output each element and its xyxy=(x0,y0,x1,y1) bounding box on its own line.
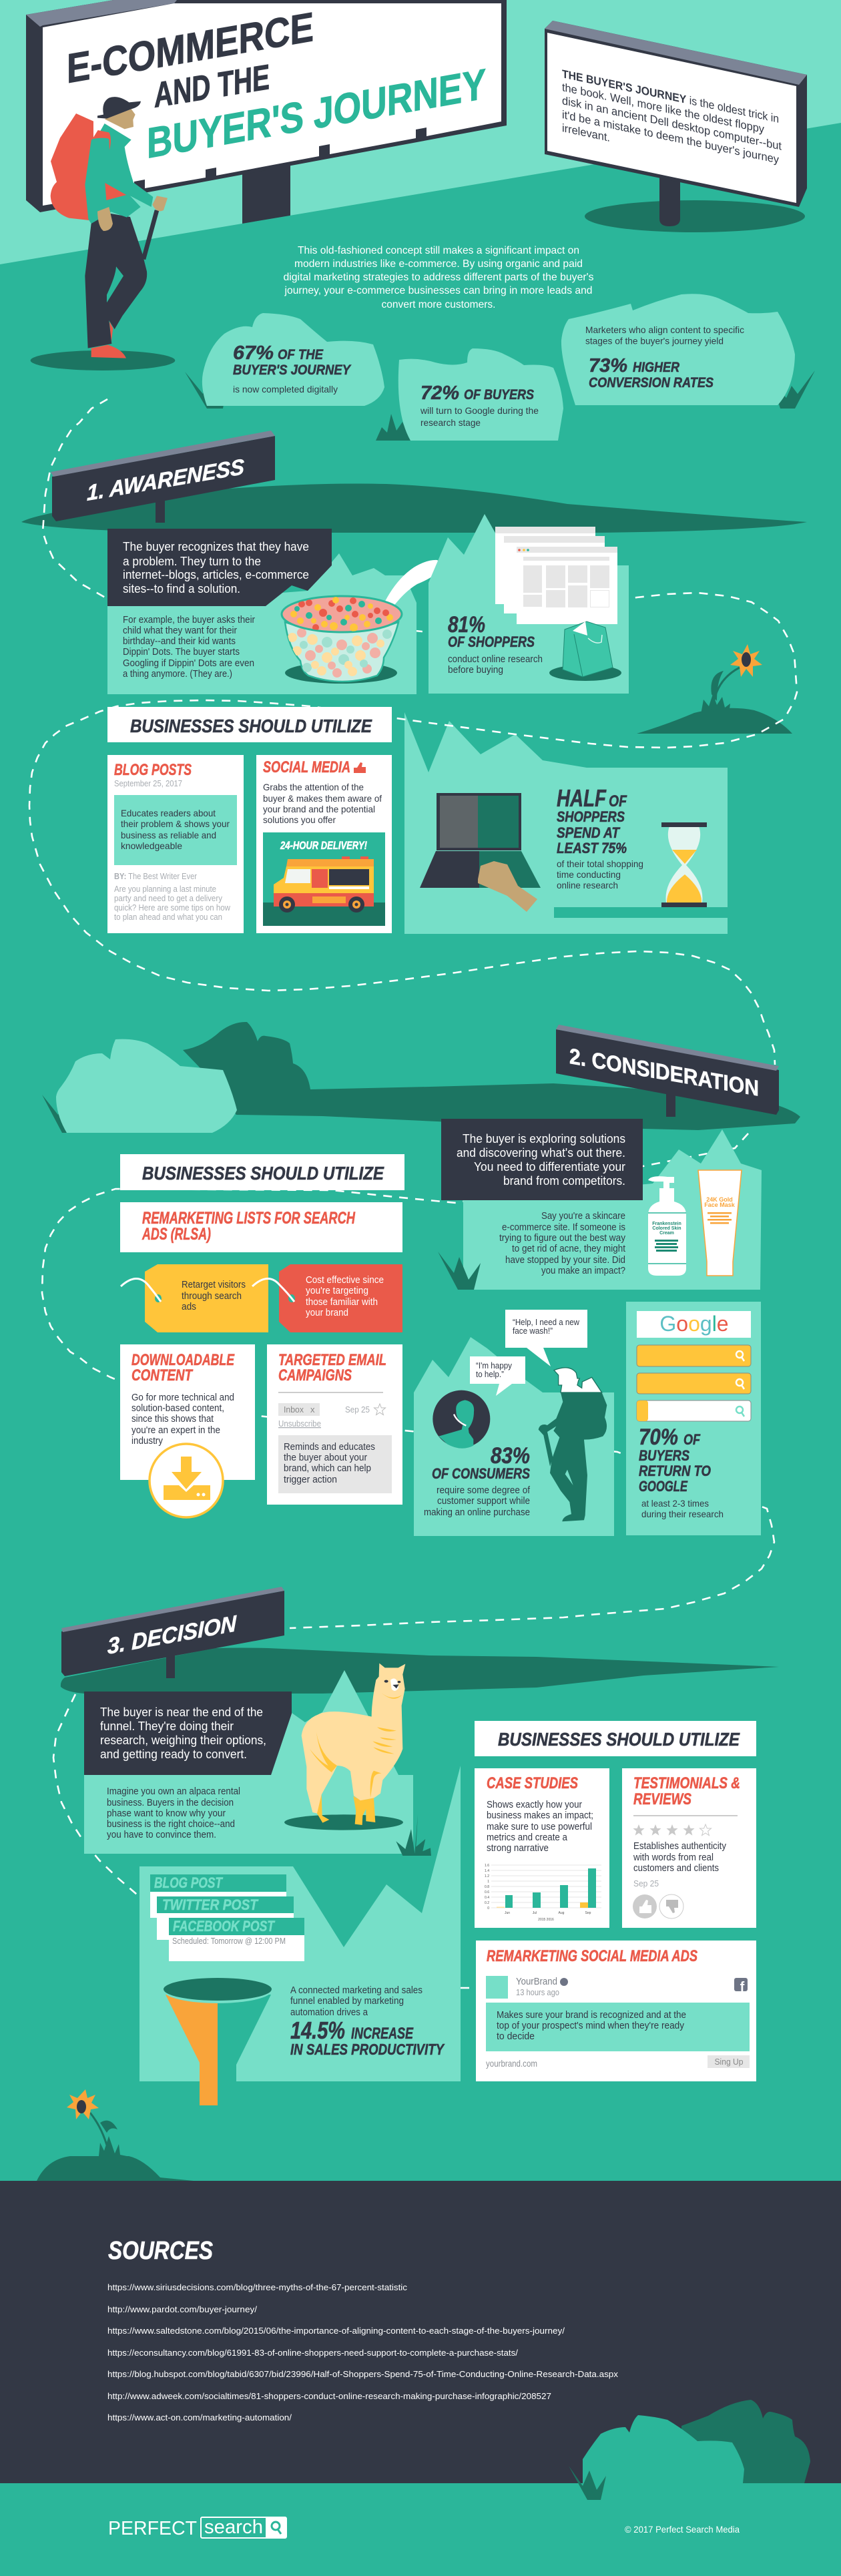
card: downloadable content: CONTENT xyxy=(131,1366,194,1384)
card: targeted email campaigns: trigger action xyxy=(284,1475,337,1485)
bar chart: 1.4 xyxy=(485,1869,489,1873)
bar chart: 0.8 xyxy=(485,1885,489,1889)
panel: alpaca example xyxy=(84,1663,431,1856)
card: blog posts: BLOG POSTS xyxy=(114,761,192,779)
stat text: 70% xyxy=(639,1425,678,1450)
source links: https://www.saltedstone.com/blog/2015/06/the-importance-of-aligning-content-to-each-stage-of-the-buyers-journey/ xyxy=(107,2326,565,2336)
card: testimonials and reviews xyxy=(622,1768,756,1928)
intro paragraph: modern industries like e-commerce. By using organic and paid xyxy=(294,258,583,270)
panel: cereal example xyxy=(107,553,442,694)
stat text: at least 2-3 times xyxy=(641,1498,709,1509)
card: blog posts: Are you planning a last minute xyxy=(114,884,216,894)
stat bush: 67%: 67% xyxy=(233,342,274,364)
panel: 70% return to Google xyxy=(626,1302,761,1535)
stat text: before buying xyxy=(448,665,503,676)
card: blog posts: party and need to get a delivery xyxy=(114,893,222,903)
callout: decision intro xyxy=(84,1692,292,1775)
card: blog posts: knowledgeable xyxy=(121,840,182,851)
sign text xyxy=(562,67,782,166)
card: testimonials and reviews: Establishes authenticity xyxy=(633,1841,727,1852)
stat bush: 73%: HIGHER xyxy=(633,360,680,375)
source links: https://blog.hubspot.com/blog/tabid/6307/bid/23996/Half-of-Shoppers-Spend-75-of-Time-Conducting-Online-Research-Data.aspx xyxy=(107,2369,619,2379)
logo: Perfect Search xyxy=(108,2517,286,2539)
skincare text: e-commerce site. If someone is xyxy=(502,1222,625,1233)
card: testimonials and reviews: Sep 25 xyxy=(633,1878,659,1888)
card: downloadable content: since this shows that xyxy=(131,1414,214,1425)
speech bubble: help, face wash: face wash!” xyxy=(513,1326,553,1336)
intro paragraph: This old-fashioned concept still makes a significant impact on xyxy=(298,245,579,256)
icon: thumbs down xyxy=(659,1894,683,1918)
stat: half of shoppers: of their total shopping xyxy=(557,858,643,869)
sign: 3. Decision: 3. DECISION xyxy=(107,1611,237,1659)
stat bush: 72%: 72% xyxy=(420,382,459,404)
card: case studies: Shows exactly how your xyxy=(487,1800,582,1810)
hill: decision xyxy=(61,1647,779,1694)
search bar 1 xyxy=(637,1345,751,1366)
callout: decision intro: funnel. They're doing their xyxy=(100,1720,234,1733)
stat text: OF SHOPPERS xyxy=(448,633,535,650)
callout: consideration intro: brand from competitors. xyxy=(503,1174,625,1188)
callout: awareness intro: The buyer recognizes that they have xyxy=(123,540,309,553)
card: downloadable content: solution-based content, xyxy=(131,1403,224,1414)
icon: face mask tube xyxy=(698,1170,742,1276)
grass by bush xyxy=(569,2466,606,2500)
copyright: © 2017 Perfect Search Media xyxy=(625,2524,740,2535)
callout: consideration intro: You need to differentiate your xyxy=(474,1160,625,1174)
stat text: GOOGLE xyxy=(639,1478,688,1495)
intro paragraph: journey, your e-commerce businesses can bring in more leads and xyxy=(284,285,593,296)
bar chart: 1.6 xyxy=(485,1864,489,1868)
icon: shopping bag xyxy=(549,621,621,681)
tag: retarget visitors: Retarget visitors xyxy=(182,1280,246,1290)
stat bush: 67% xyxy=(185,313,384,409)
stat: half of shoppers: time conducting xyxy=(557,869,621,880)
card: social media xyxy=(256,755,392,933)
stat bush: 67%: BUYER'S JOURNEY xyxy=(233,362,352,378)
hiker with backpack xyxy=(31,97,175,370)
panel: funnel xyxy=(139,1766,461,2105)
icon: thumbs up xyxy=(633,1894,657,1918)
card: blog posts: to plan ahead and what you can xyxy=(114,912,222,922)
bar chart: Sep xyxy=(585,1911,591,1915)
icon: laptop and hand xyxy=(420,793,541,912)
post card: facebook: Scheduled: Tomorrow @ 12:00 PM xyxy=(172,1936,286,1946)
example text: a thing anymore. (They are.) xyxy=(123,668,232,680)
icon: pump bottle: Cream xyxy=(659,1231,674,1236)
card: remarketing social media ads: top of your prospect's mind when they're ready xyxy=(497,2020,684,2031)
star rating xyxy=(633,1824,712,1836)
panel: half of shoppers xyxy=(404,712,728,934)
card: case studies: strong narrative xyxy=(487,1843,549,1854)
hill: awareness xyxy=(21,483,807,533)
icon: support agent xyxy=(433,1390,490,1449)
stat text: A connected marketing and sales xyxy=(290,1985,423,1996)
stat text xyxy=(424,1443,531,1518)
sign: 3. Decision xyxy=(61,1587,284,1678)
google search box xyxy=(637,1311,751,1338)
skincare text: to get rid of acne, they might xyxy=(512,1243,626,1254)
sign: 2. Consideration: 2. CONSIDERATION xyxy=(569,1044,759,1101)
food truck illustration: 24-HOUR DELIVERY! xyxy=(280,839,367,852)
tag: retarget visitors: ads xyxy=(182,1302,196,1312)
card: testimonials and reviews: REVIEWS xyxy=(633,1790,691,1808)
speech bubble: help, face wash xyxy=(505,1310,587,1366)
card: social media: your brand and the potential xyxy=(263,804,375,814)
stat text: 81% xyxy=(448,612,485,637)
source links: https://www.siriusdecisions.com/blog/three-myths-of-the-67-percent-statistic xyxy=(107,2282,408,2292)
card: blog posts: their problem & shows your xyxy=(121,818,230,829)
bar chart: 1 xyxy=(487,1880,489,1884)
card: targeted email campaigns: the buyer about your xyxy=(284,1453,367,1463)
icon: facebook: f xyxy=(740,1980,745,1995)
source links: https://www.act-on.com/marketing-automation/ xyxy=(107,2412,292,2422)
example text: business. Buyers in the decision xyxy=(107,1797,234,1808)
sign text: disk in an ancient Dell desktop computer--but xyxy=(562,93,782,153)
flower on hill xyxy=(37,2089,194,2181)
stat text: making an online purchase xyxy=(424,1507,530,1518)
panel: 83% of consumers xyxy=(414,1337,614,1536)
card: remarketing social media ads: YourBrand xyxy=(516,1977,557,1987)
sign: 2. Consideration xyxy=(556,1025,779,1117)
stat: half of shoppers: OF xyxy=(609,792,627,810)
card: targeted email campaigns: Unsubscribe xyxy=(278,1419,321,1429)
intro paragraph xyxy=(283,245,594,310)
card: blog posts: Educates readers about xyxy=(121,808,216,818)
card: social media: Grabs the attention of the xyxy=(263,782,364,792)
bar chart: 0 xyxy=(487,1906,489,1910)
callout: awareness intro: sites--to find a solution. xyxy=(123,582,240,595)
example text: phase want to know why your xyxy=(107,1808,226,1819)
title text: AND THE xyxy=(154,57,270,115)
card: targeted email campaigns: TARGETED EMAIL xyxy=(278,1351,386,1369)
sign: 1. Awareness: 1. AWARENESS xyxy=(87,455,244,506)
heading: businesses should utilize (decision): BUSINESSES SHOULD UTILIZE xyxy=(498,1729,740,1750)
stat bush: 73%: 73% xyxy=(589,355,627,376)
card: targeted email campaigns: Inbox xyxy=(284,1404,304,1414)
card: blog posts: business as reliable and xyxy=(121,830,216,840)
stat: half of shoppers: SPEND AT xyxy=(557,824,620,841)
stat: half of shoppers: LEAST 75% xyxy=(557,840,627,856)
alpaca illustration xyxy=(284,1663,431,1856)
card: remarketing lists: ADS (RLSA) xyxy=(142,1225,211,1244)
source links: http://www.pardot.com/buyer-journey/ xyxy=(107,2304,257,2314)
tag: cost effective: you're targeting xyxy=(306,1286,368,1296)
card: case studies xyxy=(475,1768,609,1928)
card: remarketing social media ads: REMARKETING SOCIAL MEDIA ADS xyxy=(487,1947,697,1965)
post card: twitter xyxy=(157,1896,294,1940)
bar chart: 0.4 xyxy=(485,1896,489,1900)
stat: half of shoppers: online research xyxy=(557,880,618,890)
skincare text: you make an impact? xyxy=(541,1265,625,1276)
card: downloadable content xyxy=(120,1344,255,1517)
stat bush: 73%: stages of the buyer's journey yield xyxy=(585,335,724,346)
icon: hourglass xyxy=(661,822,707,907)
skincare text: have stopped by your site. Did xyxy=(505,1254,625,1266)
panel: skincare example xyxy=(438,1129,762,1290)
icon: pump bottle xyxy=(648,1176,686,1276)
bar chart: 0.2 xyxy=(485,1901,489,1905)
example text xyxy=(123,614,255,680)
example text xyxy=(107,1786,240,1840)
card: remarketing social media ads: 13 hours ago xyxy=(516,1987,559,1997)
card: downloadable content: you're an expert in the xyxy=(131,1425,220,1436)
stat text: 83% xyxy=(491,1443,530,1469)
billboard: main title xyxy=(26,0,507,230)
example text: For example, the buyer asks their xyxy=(123,614,255,625)
card: case studies: metrics and create a xyxy=(487,1832,568,1843)
tag: cost effective: those familiar with xyxy=(306,1297,378,1308)
post card: facebook: FACEBOOK POST xyxy=(173,1918,275,1935)
stat bush: 72%: research stage xyxy=(420,417,481,428)
heading: businesses should utilize (consideration): BUSINESSES SHOULD UTILIZE xyxy=(142,1163,384,1184)
bar chart: Aug xyxy=(559,1911,565,1915)
heading: businesses should utilize (decision) xyxy=(475,1721,756,1756)
icon: verified badge xyxy=(560,1978,568,1986)
logo: Perfect Search: search xyxy=(204,2517,263,2538)
tag: retarget visitors xyxy=(121,1264,268,1332)
source links: http://www.adweek.com/socialtimes/81-shoppers-conduct-online-research-making-purchase-infographic/208527 xyxy=(107,2391,551,2401)
stat: half of shoppers: SHOPPERS xyxy=(557,808,625,825)
tag: cost effective xyxy=(252,1264,402,1332)
callout: decision intro: research, weighing their options, xyxy=(100,1734,266,1747)
sources heading: SOURCES xyxy=(108,2237,213,2265)
source links: https://econsultancy.com/blog/61991-83-of-online-shoppers-need-support-to-complete-a-purchase-stats/ xyxy=(107,2348,518,2358)
card: blog posts: quick? Here are some tips on how xyxy=(114,903,231,913)
callout: awareness intro: a problem. They turn to the xyxy=(123,555,261,568)
tag: cost effective: your brand xyxy=(306,1308,348,1318)
bar chart: 2015 2016 xyxy=(538,1918,554,1922)
stat: half of shoppers: HALF xyxy=(557,784,607,812)
example text: birthday--and their kid wants xyxy=(123,635,236,647)
card: targeted email campaigns: Sep 25 xyxy=(345,1404,370,1414)
stat bush: 73%: Marketers who align content to specific xyxy=(585,324,744,335)
stat bush: 73%: CONVERSION RATES xyxy=(589,375,714,391)
card: remarketing social media ads: yourbrand.com xyxy=(486,2058,537,2069)
stat bush: 72%: OF BUYERS xyxy=(464,387,534,403)
food truck illustration xyxy=(263,832,385,926)
hiker silhouette xyxy=(539,1368,607,1521)
stat text: during their research xyxy=(641,1509,724,1519)
icon: funnel xyxy=(164,1978,272,2105)
icon: download xyxy=(150,1444,223,1517)
skincare text xyxy=(499,1210,626,1276)
sources section xyxy=(0,2181,841,2483)
icon: bowl of Dippin' Dots xyxy=(282,560,442,684)
icon: pump bottle: Colored Skin xyxy=(652,1226,681,1231)
stat text: OF CONSUMERS xyxy=(432,1465,530,1482)
post card: blog xyxy=(150,1874,286,1918)
speech bubble: happy to help: to help.” xyxy=(476,1369,504,1379)
card: testimonials and reviews: TESTIMONIALS & xyxy=(633,1774,740,1792)
google search box: Google xyxy=(659,1312,729,1336)
post card: facebook xyxy=(169,1918,304,1961)
search bar 3 xyxy=(637,1400,751,1421)
card: case studies: CASE STUDIES xyxy=(487,1774,578,1792)
stat: half of shoppers xyxy=(557,784,643,890)
card: remarketing lists xyxy=(120,1202,402,1252)
card: case studies: make sure to use powerful xyxy=(487,1822,592,1832)
billboard: buyer's journey definition xyxy=(545,21,807,232)
bar chart: Jul xyxy=(533,1911,537,1915)
card: targeted email campaigns: x xyxy=(310,1404,315,1414)
card: testimonials and reviews: customers and clients xyxy=(633,1863,719,1874)
title text xyxy=(67,3,486,168)
bushes xyxy=(583,2400,810,2483)
callout: consideration intro: The buyer is exploring solutions xyxy=(463,1132,625,1145)
tag: retarget visitors: through search xyxy=(182,1291,242,1302)
bar chart xyxy=(485,1864,601,1922)
sign text: it'd be a mistake to deem the buyer's journey xyxy=(562,107,779,166)
card: testimonials and reviews: with words from real xyxy=(633,1852,714,1863)
skincare text: trying to figure out the best way xyxy=(499,1232,625,1244)
post card: twitter: TWITTER POST xyxy=(162,1896,258,1913)
stat text: IN SALES PRODUCTIVITY xyxy=(290,2041,445,2058)
stat bush: 73% xyxy=(561,294,815,409)
card: social media: SOCIAL MEDIA xyxy=(263,758,350,776)
callout: awareness intro xyxy=(107,529,332,606)
icon: thumbs up xyxy=(354,762,366,773)
bar chart: 0.6 xyxy=(485,1890,489,1894)
card: remarketing social media ads: Makes sure your brand is recognized and at the xyxy=(497,2009,686,2021)
dashed journey path xyxy=(29,399,797,1988)
stat text xyxy=(448,612,543,676)
example text: child what they want for their xyxy=(123,625,237,636)
stat text: conduct online research xyxy=(448,654,543,665)
icon: facebook xyxy=(734,1978,748,1995)
sign text: the book. Well, more like the oldest floppy xyxy=(562,80,764,136)
card: downloadable content: Go for more technical and xyxy=(131,1392,234,1403)
card: remarketing lists: REMARKETING LISTS FOR SEARCH xyxy=(142,1209,356,1228)
speech bubble: happy to help xyxy=(470,1356,525,1396)
card: downloadable content: DOWNLOADABLE xyxy=(131,1351,235,1369)
stat text: require some degree of xyxy=(437,1485,531,1496)
speech bubble: happy to help: “I'm happy xyxy=(476,1360,512,1370)
hill and bushes: consideration xyxy=(42,1022,800,1133)
stat bush: 72%: will turn to Google during the xyxy=(420,405,539,416)
stat text: INCREASE xyxy=(351,2025,414,2043)
example text: Imagine you own an alpaca rental xyxy=(107,1786,240,1797)
card: remarketing social media ads: Sing Up xyxy=(714,2057,744,2067)
callout: consideration intro: and discovering what's out there. xyxy=(457,1146,625,1160)
card: downloadable content: industry xyxy=(131,1436,164,1447)
callout: awareness intro: internet--blogs, articles, e-commerce xyxy=(123,568,309,581)
stat text xyxy=(639,1425,724,1519)
stat text: BUYERS xyxy=(639,1447,689,1464)
card: targeted email campaigns: CAMPAIGNS xyxy=(278,1366,352,1384)
intro paragraph: convert more customers. xyxy=(382,299,495,310)
sign: 1. Awareness xyxy=(51,431,275,523)
tag: cost effective: Cost effective since xyxy=(306,1275,384,1286)
example text: Googling if Dippin' Dots are even xyxy=(123,658,254,669)
card: social media: buyer & makes them aware of xyxy=(263,793,382,804)
speech bubble: help, face wash: “Help, I need a new xyxy=(513,1317,580,1327)
stat bush: 67%: OF THE xyxy=(278,347,324,362)
callout: decision intro: The buyer is near the end of the xyxy=(100,1706,263,1719)
card: remarketing social media ads: to decide xyxy=(497,2031,535,2042)
logo: Perfect Search: PERFECT xyxy=(108,2518,197,2539)
card: case studies: business makes an impact; xyxy=(487,1810,593,1821)
search bar 2 xyxy=(637,1373,751,1394)
heading: businesses should utilize (consideration) xyxy=(120,1154,404,1190)
title text: BUYER'S JOURNEY xyxy=(147,60,486,168)
stat text: automation drives a xyxy=(290,2007,368,2018)
card: targeted email campaigns: brand, which can help xyxy=(284,1463,371,1474)
example text: Dippin' Dots. The buyer starts xyxy=(123,646,240,658)
heading: businesses should utilize (awareness): BUSINESSES SHOULD UTILIZE xyxy=(130,716,372,736)
stat text: OF xyxy=(683,1431,700,1448)
callout: decision intro: and getting ready to convert. xyxy=(100,1748,247,1761)
bar chart: Jun xyxy=(505,1911,510,1915)
hill: flower mound right xyxy=(637,644,792,734)
card: blog posts: BY: The Best Writer Ever xyxy=(114,871,198,881)
icon: pump bottle: Frankenstein xyxy=(652,1222,681,1226)
card: blog posts: September 25, 2017 xyxy=(114,778,182,788)
skincare text: Say you're a skincare xyxy=(541,1210,625,1222)
icon: face mask tube: 24K Gold xyxy=(706,1196,733,1203)
example text: you have to convince them. xyxy=(107,1829,216,1840)
card: blog posts xyxy=(107,755,244,933)
card: targeted email campaigns xyxy=(267,1344,402,1505)
stat text: funnel enabled by marketing xyxy=(290,1996,404,2007)
sign text: irrelevant. xyxy=(562,121,610,144)
card: remarketing social media ads xyxy=(476,1941,756,2081)
stat text: RETURN TO xyxy=(639,1463,711,1479)
intro paragraph: digital marketing strategies to address different parts of the buyer's xyxy=(283,272,594,283)
stat text: 14.5% xyxy=(290,2017,345,2044)
icon: face mask tube: Face Mask xyxy=(704,1202,736,1208)
stat bush: 67%: is now completed digitally xyxy=(233,384,338,395)
post card: blog: BLOG POST xyxy=(154,1874,223,1891)
card: social media: solutions you offer xyxy=(263,814,336,825)
stat text xyxy=(290,1985,445,2058)
browser windows xyxy=(495,527,617,624)
bar chart: 1.2 xyxy=(485,1874,489,1878)
heading: businesses should utilize (awareness) xyxy=(107,707,392,742)
card: targeted email campaigns: Reminds and educates xyxy=(284,1442,375,1453)
stat text: customer support while xyxy=(437,1495,530,1507)
source links xyxy=(107,2282,619,2422)
stat bush: 72% xyxy=(376,348,563,441)
example text: business is the right choice--and xyxy=(107,1818,235,1830)
sign text: THE BUYER'S JOURNEY is the oldest trick in xyxy=(562,67,779,125)
panel: 81% of shoppers xyxy=(429,514,629,694)
callout: consideration intro xyxy=(441,1119,643,1200)
